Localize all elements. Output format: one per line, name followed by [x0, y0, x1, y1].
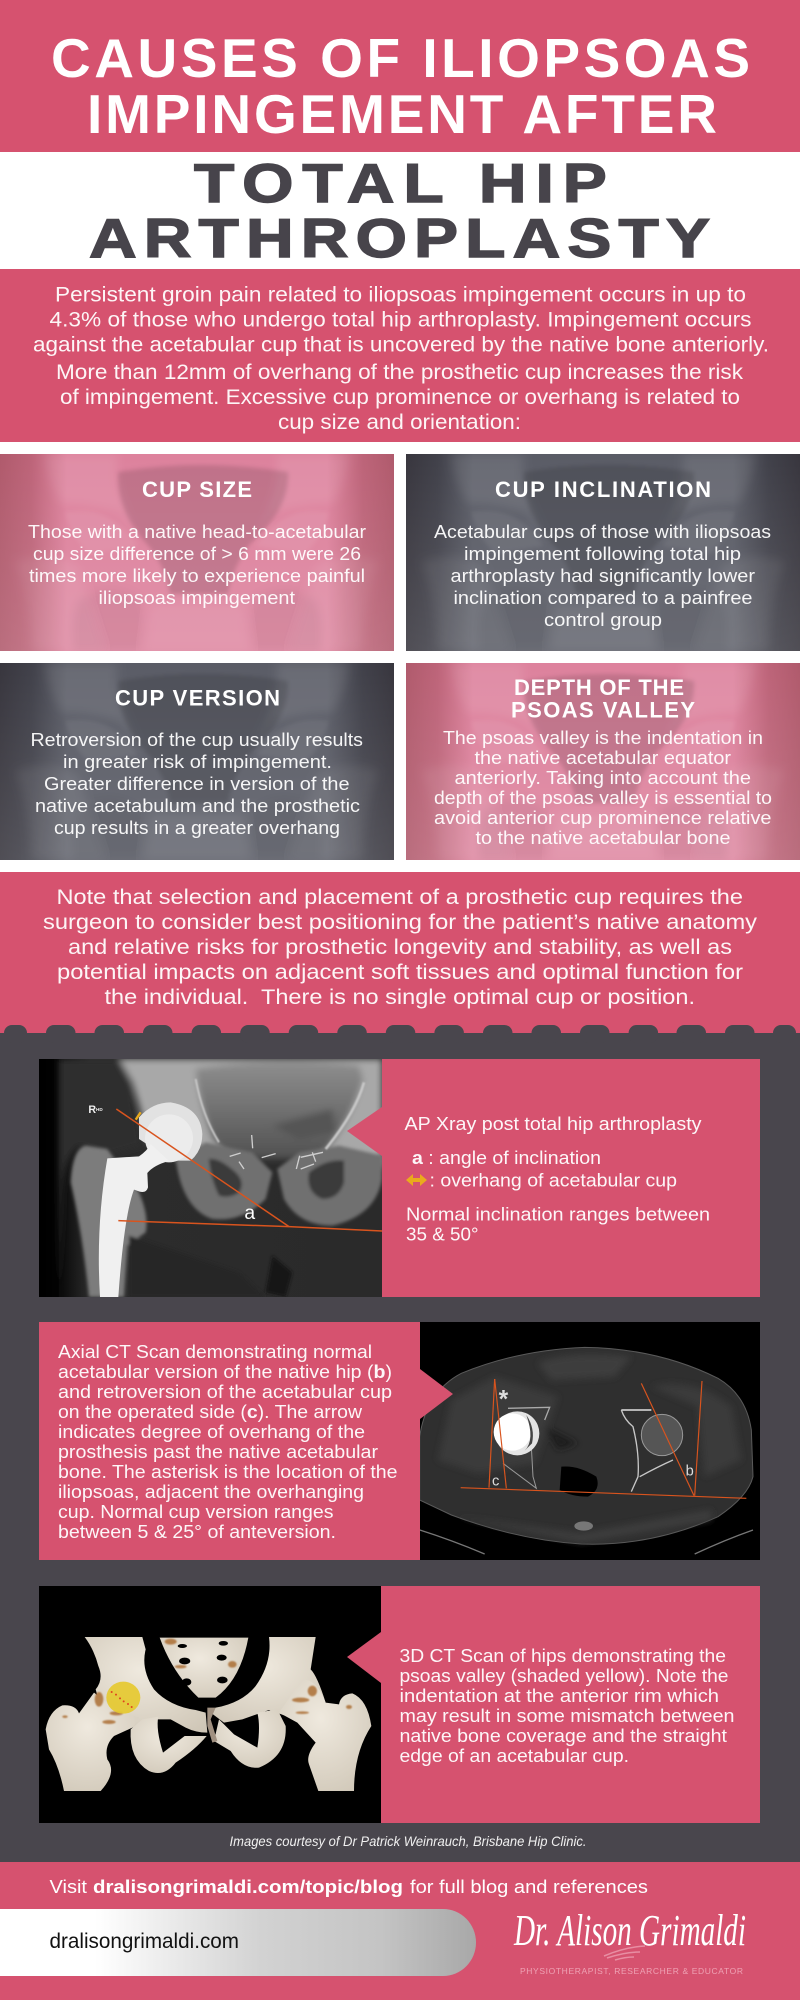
text: 3D CT caption: edge of an acetabular cup. — [400, 1746, 629, 1766]
header band: causes of iliopsoas impingement after — [0, 0, 800, 152]
text: cup inclination: impingement following total hip — [464, 544, 741, 564]
text: psoas valley: anteriorly. Taking into account the — [454, 768, 751, 788]
heading: cup inclination: CUP INCLINATION — [495, 477, 711, 502]
text: cup version: cup results in a greater overhang — [54, 818, 340, 838]
table curves — [420, 1530, 753, 1554]
intro paragraph 1 — [33, 284, 769, 356]
note text: Note that selection and placement of a prosthetic cup requires the — [56, 886, 743, 909]
text: cup inclination: inclination compared to a painfree — [454, 588, 752, 608]
panel: AP x-ray — [39, 1059, 760, 1297]
image: AP x-ray of hip replacement — [39, 1059, 382, 1297]
intro paragraph 1: 4.3% of those who undergo total hip arthroplasty. Impingement occurs — [50, 308, 752, 332]
text: CT caption: prosthesis past the native acetabular — [58, 1442, 378, 1462]
text: CT caption: bone. The asterisk is the location of the — [58, 1462, 398, 1482]
text: 3D CT caption: 3D CT Scan of hips demonstrating the — [400, 1646, 726, 1666]
text: cup inclination — [434, 522, 771, 630]
note text: surgeon to consider best positioning for the patient’s native anatomy — [43, 911, 758, 934]
yellow shaded psoas valley — [106, 1682, 140, 1714]
label a: a — [244, 1203, 255, 1224]
text: psoas valley: The psoas valley is the indentation in — [443, 728, 763, 748]
image: axial CT scan — [420, 1322, 760, 1560]
text: CT caption — [58, 1342, 398, 1542]
intro paragraph 1: against the acetabular cup that is uncovered by the native bone anteriorly. — [33, 334, 769, 356]
left ischium — [131, 1717, 207, 1773]
text: AP x-ray caption: : overhang of acetabular cup — [430, 1170, 677, 1190]
panel: 3D CT — [39, 1586, 760, 1823]
icon: yellow double arrow — [406, 1174, 427, 1186]
image credit: Images courtesy of Dr Patrick Weinrauch, Brisbane Hip Clinic. — [230, 1833, 586, 1849]
image: 3D CT pelvis — [39, 1586, 381, 1823]
website bar — [0, 1909, 476, 1976]
orange lines — [461, 1379, 746, 1498]
dark imaging section — [0, 1025, 800, 1862]
pelvic bone — [503, 1407, 673, 1492]
text: AP x-ray caption: Normal inclination ranges between — [406, 1204, 710, 1224]
text: cup version: in greater risk of impingement. — [63, 752, 332, 772]
text: cup size: cup size difference of > 6 mm were 26 — [33, 544, 361, 564]
text: CT caption: acetabular version of the native hip ( b) — [58, 1362, 392, 1382]
label asterisk: * — [499, 1386, 509, 1413]
text: psoas valley: to the native acetabular bone — [476, 828, 730, 848]
text: cup inclination: Acetabular cups of those with iliopsoas — [434, 522, 771, 542]
heading: depth of the psoas valley — [511, 675, 695, 722]
right ischium — [214, 1709, 286, 1768]
arrow — [347, 1632, 381, 1683]
heading: depth of the psoas valley: PSOAS VALLEY — [511, 698, 695, 722]
text: CT caption: on the operated side ( c). The arrow — [58, 1402, 363, 1422]
intro paragraph 2 — [56, 361, 744, 434]
text: cup size: iliopsoas impingement — [98, 588, 295, 608]
prosthetic head — [494, 1411, 539, 1455]
text: psoas valley: depth of the psoas valley is essential to — [434, 788, 772, 808]
tagline: PHYSIOTHERAPIST, RESEARCHER & EDUCATOR — [520, 1966, 743, 1976]
subtitle line 1: TOTAL HIP — [194, 152, 607, 214]
panel: cup version — [0, 663, 394, 860]
sacral foramina — [178, 1641, 228, 1686]
website bar: dralisongrimaldi.com — [50, 1930, 239, 1953]
note text: potential impacts on adjacent soft tissues and optimal function for — [57, 961, 743, 984]
right ilium and pubis — [211, 1637, 326, 1723]
text: cup version: native acetabulum and the prosthetic — [35, 796, 360, 816]
intro panel — [0, 269, 800, 442]
note text: and relative risks for prosthetic longevity and stability, as well as — [68, 936, 732, 959]
intro paragraph 2: of impingement. Excessive cup prominence or overhang is related to — [60, 386, 740, 409]
staples — [230, 1135, 323, 1169]
text: AP x-ray caption: 35 & 50° — [406, 1224, 478, 1244]
text: cup size — [28, 522, 366, 608]
signature logo — [513, 1906, 746, 1976]
text: CT caption: indicates degree of overhang of the — [58, 1422, 365, 1442]
note text: the individual. There is no single optimal cup or position. — [104, 986, 695, 1009]
text: 3D CT caption: may result in some mismatch between — [400, 1706, 734, 1726]
subtitle line 2: ARTHROPLASTY — [89, 207, 710, 269]
note panel — [0, 872, 800, 1034]
title line 2: IMPINGEMENT AFTER — [87, 83, 717, 145]
text: psoas valley — [434, 728, 772, 848]
text: 3D CT caption: indentation at the anterior rim which — [400, 1686, 719, 1706]
panel: cup size — [0, 454, 394, 651]
text: cup inclination: control group — [544, 610, 662, 630]
note text — [43, 886, 758, 1009]
yellow overhang arrow — [136, 1112, 141, 1120]
text: CT caption: Axial CT Scan demonstrating normal — [58, 1342, 372, 1362]
arrow — [347, 1107, 382, 1156]
heading: cup version: CUP VERSION — [115, 686, 280, 710]
label b: b — [686, 1464, 694, 1480]
text: CT caption: iliopsoas, adjacent the overhanging — [58, 1482, 364, 1502]
visit line: Visit — [50, 1877, 87, 1897]
text: 3D CT caption — [400, 1646, 734, 1766]
title line 1: CAUSES OF ILIOPSOAS — [51, 27, 750, 89]
visit line: dralisongrimaldi.com/topic/blog — [93, 1877, 403, 1897]
left femur — [46, 1693, 139, 1791]
text: cup inclination: arthroplasty had significantly lower — [450, 566, 755, 586]
arrow — [420, 1369, 453, 1419]
text: cup version — [30, 730, 363, 838]
visit line: for full blog and references — [410, 1877, 648, 1897]
orange angle lines — [116, 1109, 382, 1231]
rust speckles — [62, 1639, 352, 1724]
text: AP x-ray caption: a : angle of inclination — [412, 1148, 601, 1168]
label R HD: HD — [96, 1107, 103, 1112]
heading: cup size: CUP SIZE — [142, 477, 252, 502]
sacrum — [160, 1638, 248, 1698]
panel: axial CT — [39, 1320, 763, 1562]
panel: depth of the psoas valley — [406, 663, 800, 860]
stem — [99, 1144, 169, 1297]
label c: c — [492, 1473, 499, 1489]
footer — [0, 1862, 800, 2000]
heading: depth of the psoas valley: DEPTH OF THE — [514, 675, 684, 700]
text: psoas valley: the native acetabular equator — [474, 748, 731, 768]
text: AP x-ray caption — [404, 1114, 710, 1244]
label R HD: R — [88, 1104, 96, 1116]
text: cup version: Greater difference in version of the — [44, 774, 350, 794]
text: CT caption: and retroversion of the acetabular cup — [58, 1382, 392, 1402]
signature swoosh — [604, 1946, 645, 1960]
text: psoas valley: avoid anterior cup prominence relative — [434, 808, 772, 828]
text: CT caption: cup. Normal cup version ranges — [58, 1502, 334, 1522]
right femur — [279, 1679, 371, 1791]
left ilium and pubis — [85, 1637, 207, 1733]
text: 3D CT caption: psoas valley (shaded yellow). Note the — [400, 1666, 728, 1686]
text: AP x-ray caption: AP Xray post total hip arthroplasty — [404, 1114, 702, 1134]
header band: total hip arthroplasty — [0, 152, 800, 269]
scalloped edge — [4, 1025, 796, 1043]
intro paragraph 2: More than 12mm of overhang of the prosthetic cup increases the risk — [56, 361, 744, 384]
text: 3D CT caption: native bone coverage and the straight — [400, 1726, 727, 1746]
intro paragraph 1: Persistent groin pain related to iliopsoas impingement occurs in up to — [55, 284, 746, 306]
text: cup size: Those with a native head-to-acetabular — [28, 522, 366, 542]
text: cup size: times more likely to experience painful — [29, 566, 365, 586]
cup — [139, 1102, 202, 1162]
intro paragraph 2: cup size and orientation: — [278, 411, 521, 434]
visit line — [50, 1877, 648, 1897]
text: cup version: Retroversion of the cup usually results — [30, 730, 363, 750]
panel: cup inclination — [406, 454, 800, 651]
text: CT caption: between 5 & 25° of anteversion. — [58, 1522, 336, 1542]
